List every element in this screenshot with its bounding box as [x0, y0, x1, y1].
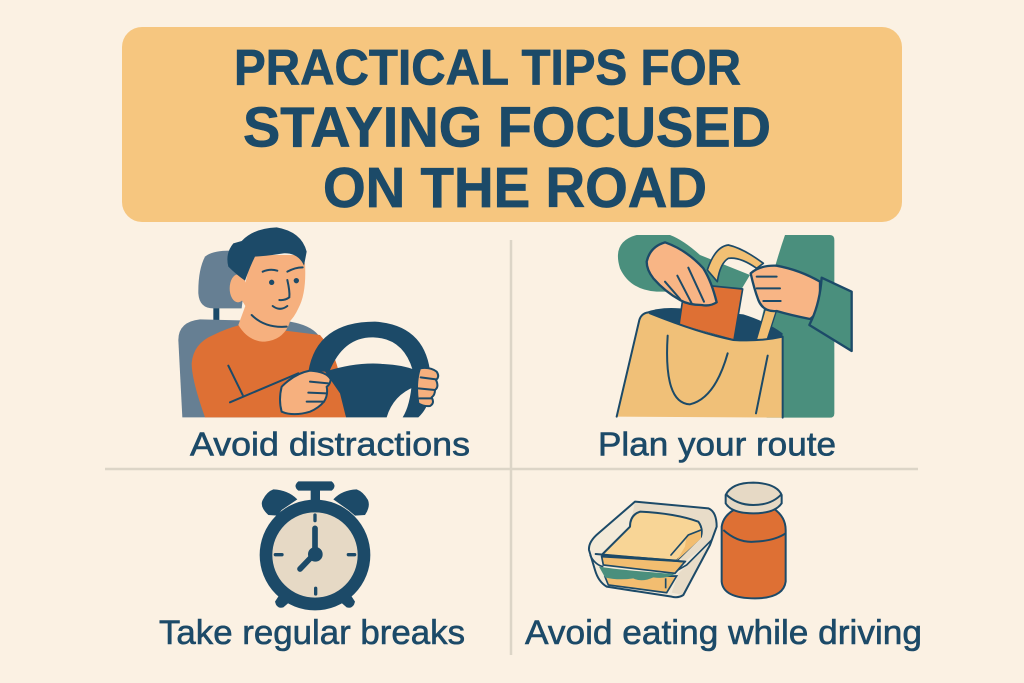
title banner	[122, 27, 902, 222]
label: take regular breaks: Take regular breaks	[159, 614, 465, 652]
icon: hands packing a bag	[617, 235, 852, 418]
icon: driver at steering wheel	[178, 227, 438, 417]
label: avoid eating while driving: Avoid eating while driving	[525, 614, 922, 652]
panel: take regular breaks	[159, 481, 465, 652]
panel: avoid distractions	[178, 227, 470, 462]
icon: alarm clock	[262, 481, 369, 608]
panel: avoid eating while driving	[525, 483, 922, 652]
label: avoid distractions: Avoid distractions	[190, 426, 470, 462]
panel: plan your route	[598, 235, 852, 462]
title banner: ON THE ROAD	[323, 156, 707, 220]
title banner: PRACTICAL TIPS FOR	[234, 40, 741, 96]
title banner: STAYING FOCUSED	[243, 96, 771, 160]
icon: sandwich box and jar	[589, 483, 786, 598]
label: plan your route: Plan your route	[598, 426, 836, 462]
